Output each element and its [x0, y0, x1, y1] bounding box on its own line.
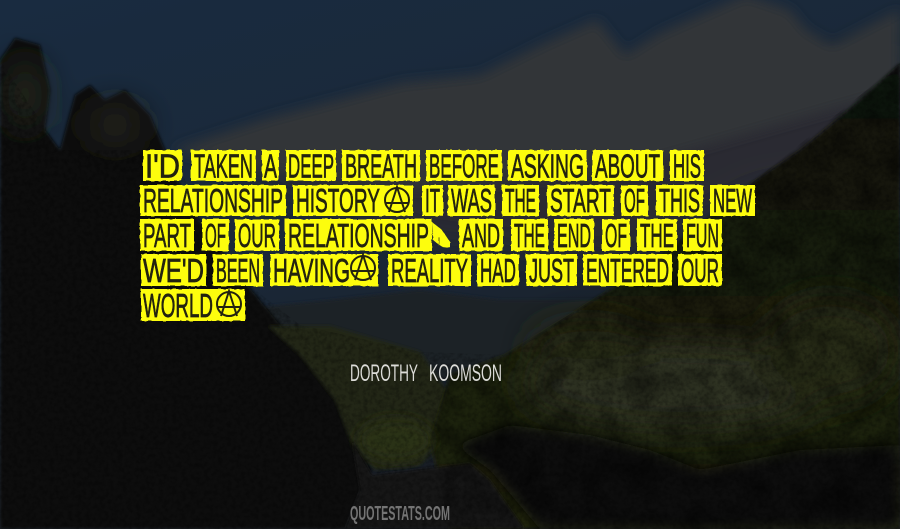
line 2: IT [425, 182, 440, 219]
background: dark foreground bushes [455, 425, 900, 529]
background: cloud haze [230, 60, 900, 260]
background: right mountain slope [430, 63, 900, 529]
line 1: ABOUT [595, 148, 660, 184]
background: dirt road [345, 440, 525, 529]
line 4: BEEN [216, 252, 260, 289]
background: lit patch by the road [357, 418, 433, 462]
line 1 [143, 148, 704, 184]
line 2 [140, 182, 755, 219]
line 1: DEEP [288, 148, 334, 184]
line 4: ENTERED [586, 252, 669, 289]
line 4: HAVING [273, 252, 350, 289]
line 4: WE'D [143, 252, 204, 289]
quote text [140, 148, 755, 324]
line 3: THE [514, 217, 545, 254]
background: tree clump shading [434, 88, 900, 529]
line 3: PART [143, 217, 191, 254]
line 2: RELATIONSHIP [143, 182, 283, 219]
icon: anarchy full stop [217, 291, 241, 316]
line 3: FUN [686, 217, 719, 254]
line 4: REALITY [391, 252, 468, 289]
background: left tree foliage [7, 59, 145, 145]
line 2: NEW [713, 182, 752, 219]
line 3 [140, 211, 722, 254]
line 2: START [550, 182, 611, 219]
icon: anarchy full stop [351, 255, 375, 280]
line 2: OF [624, 182, 645, 219]
line 1: I'D [145, 148, 180, 184]
line 1: A [264, 148, 277, 184]
line 2: THE [505, 182, 536, 219]
line 3: OF [605, 217, 627, 254]
line 2: HISTORY [296, 182, 380, 219]
line 3: AND [462, 217, 500, 254]
background: distant mountains [230, 290, 600, 380]
line 3: OUR [238, 217, 276, 254]
line 1: ASKING [511, 148, 584, 184]
line 3: END [557, 217, 591, 254]
line 2: THIS [659, 182, 700, 219]
background: left grassy slope [268, 326, 450, 470]
line 1: BEFORE [429, 148, 499, 184]
line 4: JUST [529, 252, 574, 289]
line 3: RELATIONSHIP [288, 217, 429, 254]
line 2: WAS [451, 182, 492, 219]
line 4 [141, 252, 722, 289]
line 3: , [437, 211, 441, 248]
watermark: QUOTESTATS.COM [350, 503, 450, 525]
line 3: OF [205, 217, 226, 254]
line 1: BREATH [345, 148, 417, 184]
line 3: THE [640, 217, 674, 254]
line 4: OUR [681, 252, 719, 289]
author name: KOOMSON [429, 360, 502, 387]
line 1: HIS [673, 148, 701, 184]
icon: anarchy full stop [385, 187, 409, 212]
line 5: WORLD [143, 287, 213, 324]
line 1: TAKEN [194, 148, 253, 184]
author name: DOROTHY [350, 360, 418, 387]
background: clouds [172, 0, 900, 190]
background: sunlit foliage [520, 295, 900, 430]
background: left tree mass [0, 38, 370, 529]
line 4: HAD [480, 252, 516, 289]
